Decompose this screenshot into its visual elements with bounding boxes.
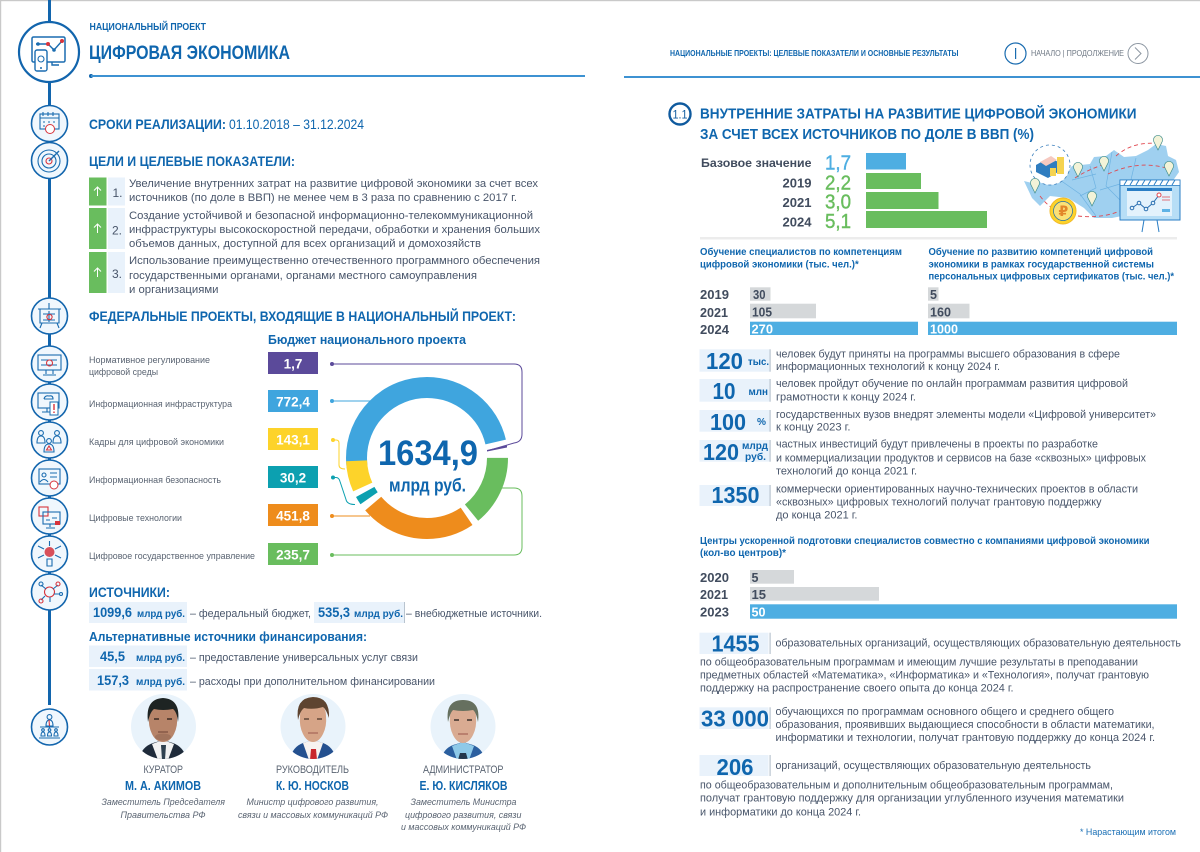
- goal 3: Использование преимущественно отечественного программного обеспечения: [129, 255, 540, 267]
- stat: 120 billion: технологий до конца 2021 г.: [776, 466, 917, 478]
- donut centre total: [378, 434, 478, 496]
- stat: 1350 projects: «сквозных» цифровых технологий получат грантовую поддержку: [776, 497, 1102, 509]
- goal 2: [89, 208, 541, 250]
- icon: infrastructure: [32, 384, 68, 420]
- list: federal project names: Информационная безопасность: [89, 475, 221, 486]
- budget value boxes: 1,7: [284, 356, 302, 372]
- goal 3: и организациями: [129, 284, 218, 296]
- panel: specialists training chart: 105: [752, 306, 772, 320]
- bar chart: GDP share: 5,1: [825, 211, 851, 233]
- list: federal project names: Нормативное регулирование: [89, 355, 210, 366]
- stat: 10 million: [700, 378, 1128, 404]
- heading: sources: ИСТОЧНИКИ:: [89, 584, 170, 600]
- stat: 120 billion: руб.: [745, 451, 766, 463]
- source row: budget and off-budget: 535,3: [318, 605, 350, 620]
- bar chart: GDP share: Базовое значение: [701, 158, 812, 170]
- goal 1: [89, 178, 539, 206]
- panel: acceleration centres chart: 2020: [700, 571, 729, 585]
- panel: digital certificates chart: Обучение по развитию компетенций цифровой: [928, 246, 1153, 258]
- panel: acceleration centres chart: 5: [752, 571, 758, 585]
- stat: 120 thousand: информационных технологий к концу 2024 г.: [776, 361, 1000, 373]
- icon: target: [32, 142, 68, 178]
- panel: specialists training chart: 2021: [700, 306, 728, 320]
- heading: section 1.1: ВНУТРЕННИЕ ЗАТРАТЫ НА РАЗВИТИЕ ЦИФРОВОЙ ЭКОНОМИКИ: [700, 104, 1136, 122]
- donut sliver: purple segment: [487, 446, 507, 452]
- map pins: [1030, 135, 1174, 206]
- bar chart: GDP share: 2,2: [825, 172, 851, 194]
- person: curator: [102, 693, 225, 821]
- stat: 120 thousand: [700, 348, 1120, 374]
- panel: acceleration centres chart: 15: [752, 588, 766, 602]
- icon: money stack: [1030, 145, 1070, 185]
- panel: specialists training chart: [700, 246, 918, 337]
- stat: 206 organisations: организаций, осуществляющих образовательную деятельность: [776, 760, 1091, 772]
- stat: 10 million: грамотности к концу 2024 г.: [776, 392, 916, 404]
- list: federal project names: Информационная инфраструктура: [89, 399, 233, 410]
- bar chart: GDP share: 3,0: [825, 192, 851, 214]
- person: administrator: и массовых коммуникаций РФ: [401, 822, 526, 833]
- panel: digital certificates chart: персональных цифровых сертификатов (тыс. чел.)*: [928, 270, 1175, 282]
- panel: specialists training chart: цифровой экономики (тыс. чел.)*: [700, 258, 860, 270]
- icon: regulation monitor: [32, 346, 68, 382]
- bar chart: GDP share: 1,7: [825, 152, 851, 174]
- heading: alternative sources: Альтернативные источники финансирования:: [89, 630, 367, 644]
- person: administrator: Е. Ю. КИСЛЯКОВ: [420, 779, 508, 793]
- panel: specialists training chart: Обучение специалистов по компетенциям: [700, 246, 902, 258]
- goal 2: объемов данных, доступной для всех организаций и домохозяйств: [129, 238, 481, 250]
- goal 1: Увеличение внутренних затрат на развитие цифровой экономики за счет всех: [129, 178, 539, 190]
- stat: 1350 projects: [700, 482, 1138, 522]
- stat: 120 billion: млрд: [742, 441, 769, 452]
- goal 2: Создание устойчивой и безопасной информационно-телекоммуникационной: [129, 210, 533, 222]
- person: project head: К. Ю. НОСКОВ: [276, 779, 349, 793]
- illustration: map of Russia with coins and monitor: [1024, 135, 1180, 232]
- person: curator: КУРАТОР: [144, 764, 183, 776]
- stat: 33 000 students: информатики и технологии, получат грантовую поддержку до конца 2024 г.: [776, 732, 1155, 744]
- panel: specialists training chart: 30: [753, 288, 766, 302]
- budget value boxes: 235,7: [276, 548, 310, 562]
- header: right page navigation: [624, 43, 1200, 78]
- stat: 120 billion: [700, 439, 1146, 478]
- bar chart: GDP share: 2021: [782, 196, 812, 210]
- stat: 1350 projects: до конца 2021 г.: [776, 510, 858, 522]
- source row: budget and off-budget: млрд руб.: [137, 608, 185, 620]
- stat: 1455 organisations: 1455: [712, 631, 760, 657]
- icon: people: [32, 422, 68, 458]
- connector lines: [330, 362, 522, 557]
- goal 1: 1.: [112, 186, 123, 200]
- panel: acceleration centres chart: (кол-во центров)*: [700, 547, 787, 559]
- stat: 10 million: млн: [748, 387, 768, 398]
- goal 2: инфраструктуры высокоскоростной передачи, обработки и хранения больших: [129, 224, 541, 236]
- donut centre total: 1634,9: [378, 434, 478, 473]
- panel: acceleration centres chart: 50: [752, 605, 766, 619]
- stat: 100 percent: 100: [710, 409, 746, 435]
- stat: 100 percent: государственных вузов внедрят элементы модели «Цифровой университет»: [776, 409, 1156, 421]
- heading: federal projects: ФЕДЕРАЛЬНЫЕ ПРОЕКТЫ, ВХОДЯЩИЕ В НАЦИОНАЛЬНЫЙ ПРОЕКТ:: [89, 307, 516, 324]
- panel: specialists training chart: 2024: [700, 323, 729, 337]
- budget value boxes: 30,2: [280, 470, 306, 486]
- stat: 206 organisations: [700, 754, 1124, 819]
- panel: digital certificates chart: 5: [930, 288, 937, 302]
- stat: 1350 projects: коммерчески ориентированных научно-технических проектов в области: [776, 484, 1138, 496]
- text: implementation period: СРОКИ РЕАЛИЗАЦИИ:: [89, 116, 226, 132]
- source row: additional financing: – расходы при дополнительном финансировании: [190, 676, 435, 688]
- icon: technologies: [32, 498, 68, 534]
- icon: government: [32, 536, 68, 572]
- portrait: curator: [130, 693, 197, 760]
- panel: digital certificates chart: 1000: [930, 322, 958, 336]
- icon: ruble coin: ₽: [1058, 203, 1068, 219]
- stat: 100 percent: %: [757, 417, 766, 428]
- list: federal project names: Кадры для цифровой экономики: [89, 437, 224, 448]
- person: curator: М. А. АКИМОВ: [125, 779, 201, 793]
- stat: 120 billion: частных инвестиций будут привлечены в проекты по разработке: [776, 439, 1098, 451]
- footnote: * Нарастающим итогом: [1080, 827, 1176, 838]
- stat: 206 organisations: по общеобразовательным и дополнительным общеобразовательным программам,: [700, 780, 1113, 792]
- heading: goals: ЦЕЛИ И ЦЕЛЕВЫЕ ПОКАЗАТЕЛИ:: [89, 153, 295, 169]
- stat: 1455 organisations: по общеобразовательным программам и имеющим лучшие результаты в преподавании: [700, 656, 1138, 668]
- person: project head: [238, 693, 388, 821]
- panel: left timeline with icons: [19, 0, 79, 745]
- text: implementation period: [89, 116, 364, 132]
- stat: 10 million: человек пройдут обучение по онлайн программам развития цифровой: [776, 378, 1128, 390]
- stat: 120 thousand: 120: [706, 348, 743, 374]
- bar chart: GDP share: 2024: [782, 216, 812, 230]
- person: administrator: цифрового развития, связи: [405, 810, 522, 821]
- icon: calendar: [32, 106, 68, 142]
- source row: budget and off-budget: – внебюджетные источники.: [406, 608, 542, 620]
- list: federal project names: Цифровое государственное управление: [89, 551, 255, 562]
- donut centre total: млрд руб.: [389, 476, 466, 496]
- list: federal project names: [89, 355, 255, 562]
- icon: digital economy monitor: [19, 22, 79, 82]
- panel: specialists training chart: 270: [752, 322, 773, 336]
- source row: universal services: [89, 646, 418, 667]
- panel: digital certificates chart: 160: [930, 306, 951, 320]
- person: curator: Заместитель Председателя: [102, 797, 225, 808]
- stat: 33 000 students: [700, 706, 1155, 744]
- source row: universal services: млрд руб.: [136, 652, 185, 664]
- stat: 33 000 students: обучающихся по программам основного общего и среднего общего: [776, 706, 1114, 718]
- text: implementation period: 01.10.2018 – 31.12.2024: [229, 117, 364, 132]
- heading: section 1.1: 1.1: [672, 108, 688, 122]
- icon: presentation board: [32, 298, 68, 334]
- stat: 206 organisations: и информатики до конца 2024 г.: [700, 807, 861, 819]
- panel: acceleration centres chart: Центры ускоренной подготовки специалистов совместно с компаниями цифровой экономики: [700, 535, 1150, 547]
- source row: budget and off-budget: [89, 602, 542, 623]
- panel: digital certificates chart: [928, 246, 1177, 336]
- stat: 120 billion: и коммерциализации продуктов и сервисов на базе «сквозных» цифровых: [776, 453, 1146, 465]
- header: national project: НАЦИОНАЛЬНЫЙ ПРОЕКТ: [90, 20, 206, 33]
- icon: security: [32, 460, 68, 496]
- heading: section 1.1: ЗА СЧЕТ ВСЕХ ИСТОЧНИКОВ ПО ДОЛЕ В ВВП (%): [700, 127, 1034, 143]
- donut chart: budget: [356, 388, 498, 528]
- panel: sources: [89, 584, 542, 690]
- goal 3: 3.: [112, 267, 122, 281]
- source row: additional financing: 157,3: [97, 673, 129, 688]
- list: federal project names: Цифровые технологии: [89, 513, 182, 524]
- icon: sources network: [32, 574, 68, 610]
- stat: 120 thousand: человек будут приняты на программы высшего образования в сфере: [776, 348, 1120, 360]
- goal 2: 2.: [112, 224, 122, 238]
- stat: 100 percent: [700, 409, 1156, 435]
- icon: team hierarchy: [32, 709, 68, 745]
- stat: 100 percent: к концу 2023 г.: [776, 422, 850, 434]
- header: national project: [89, 20, 585, 78]
- source row: budget and off-budget: – федеральный бюджет,: [190, 608, 311, 620]
- goal 1: источников (по доле в ВВП) не менее чем в 3 раза по сравнению с 2017 г.: [129, 192, 517, 204]
- stat: 1455 organisations: образовательных организаций, осуществляющих образовательную деятельность: [776, 638, 1181, 650]
- source row: budget and off-budget: 1099,6: [93, 605, 132, 620]
- person: administrator: Заместитель Министра: [410, 797, 516, 808]
- person: project head: Министр цифрового развития,: [246, 797, 378, 808]
- stat: 33 000 students: образования, проявивших выдающиеся способности в области математики,: [776, 719, 1154, 731]
- person: curator: Правительства РФ: [120, 810, 206, 821]
- stat: 1455 organisations: поддержку на распространение своего опыта до конца 2024 г.: [700, 682, 1014, 694]
- panel: specialists training chart: 2019: [700, 288, 729, 302]
- stat: 206 organisations: 206: [716, 754, 754, 780]
- monitor chart: [1120, 180, 1180, 232]
- source row: budget and off-budget: млрд руб.: [354, 608, 403, 620]
- stat: 206 organisations: получат грантовую поддержку для организации углубленного изучения математики: [700, 793, 1124, 805]
- source row: additional financing: [89, 669, 435, 690]
- budget value boxes: 143,1: [276, 432, 310, 448]
- stat: 33 000 students: 33 000: [701, 706, 769, 732]
- stat: 1455 organisations: предметных областей «Математика», «Информатика» и «Технология», получат грантовую: [700, 669, 1149, 681]
- list: federal project names: цифровой среды: [89, 367, 158, 378]
- person: administrator: АДМИНИСТРАТОР: [423, 764, 504, 776]
- panel: digital certificates chart: экономики в рамках государственной системы: [928, 258, 1154, 270]
- budget value boxes: 772,4: [276, 394, 310, 410]
- portrait: administrator: [430, 693, 497, 760]
- panel: acceleration centres chart: [700, 535, 1177, 619]
- stat: 10 million: 10: [712, 378, 736, 404]
- person: project head: РУКОВОДИТЕЛЬ: [276, 764, 349, 776]
- bar chart: GDP share: 2019: [782, 176, 812, 190]
- stat: 1350 projects: 1350: [712, 482, 760, 508]
- bar chart: GDP share: [701, 152, 987, 233]
- heading: budget: Бюджет национального проекта: [268, 333, 467, 347]
- goal 3: [89, 252, 540, 296]
- source row: universal services: – предоставление универсальных услуг связи: [190, 652, 418, 664]
- goal 3: государственными органами, органами местного самоуправления: [129, 270, 477, 282]
- portrait: project head: [280, 693, 347, 760]
- source row: additional financing: млрд руб.: [136, 676, 185, 688]
- icon: ruble coin: [1050, 198, 1076, 224]
- person: administrator: [401, 693, 526, 833]
- panel: acceleration centres chart: 2023: [700, 605, 729, 619]
- source row: universal services: 45,5: [100, 649, 125, 664]
- panel: goals and targets: [89, 153, 541, 296]
- header: national project: ЦИФРОВАЯ ЭКОНОМИКА: [89, 43, 290, 64]
- header: right page navigation: НАЧАЛО | ПРОДОЛЖЕНИЕ: [1031, 48, 1124, 58]
- panel: acceleration centres chart: 2021: [700, 588, 728, 602]
- budget value boxes: [268, 352, 318, 565]
- heading: section 1.1: [670, 104, 1136, 143]
- budget value boxes: 451,8: [276, 508, 310, 524]
- stat: 1455 organisations: [700, 631, 1181, 694]
- header: right page navigation: НАЦИОНАЛЬНЫЕ ПРОЕКТЫ: ЦЕЛЕВЫЕ ПОКАЗАТЕЛИ И ОСНОВНЫЕ РЕЗУЛЬТАТЫ: [670, 48, 958, 58]
- stat: 120 thousand: тыс.: [748, 357, 769, 368]
- stat: 120 billion: 120: [703, 439, 739, 465]
- person: project head: связи и массовых коммуникаций РФ: [238, 810, 388, 821]
